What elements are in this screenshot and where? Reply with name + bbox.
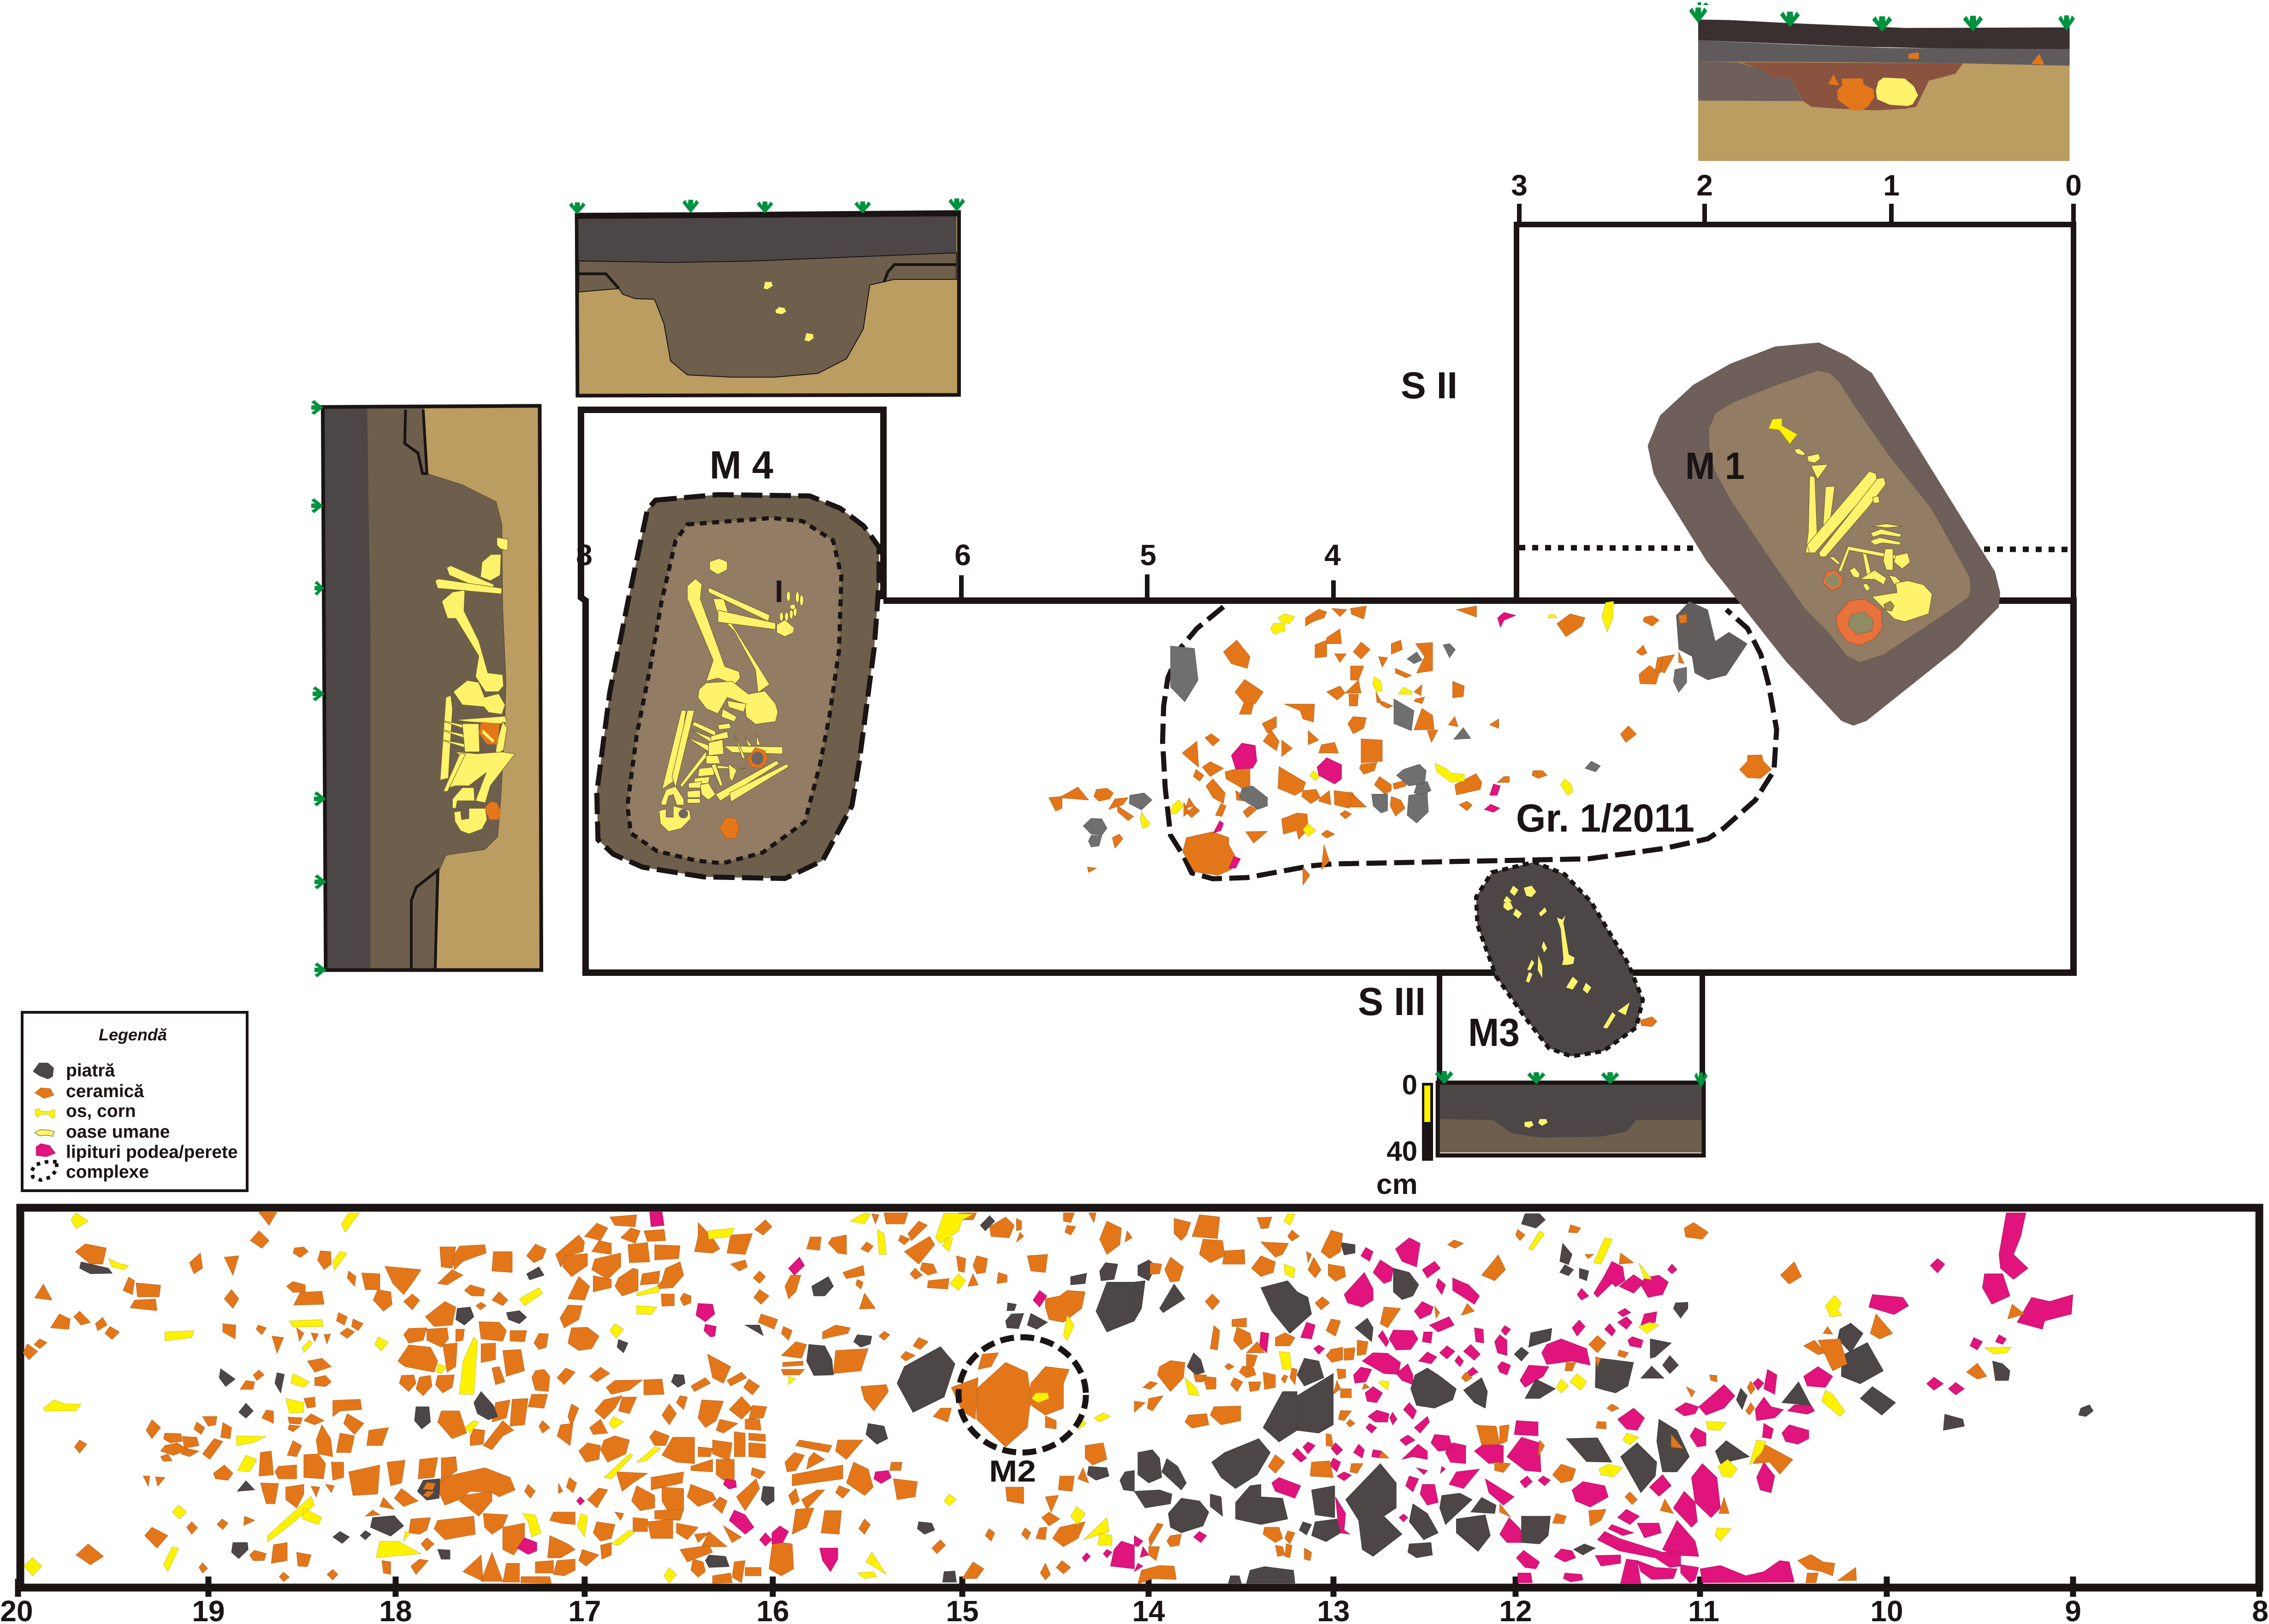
label: Gr. 1/2011: Gr. 1/2011 (1516, 797, 1694, 840)
axis numbers: upper trench: 4 (1324, 538, 1341, 572)
stones west (80, 1216, 1134, 1582)
axis numbers: upper trench: 6 (954, 538, 971, 572)
legend entries: oase umane (66, 1122, 170, 1142)
excavation trench outlines (581, 204, 2073, 1083)
vegetation markers: S III section (1435, 1071, 1707, 1088)
legend entries: lipituri podea/perete (66, 1142, 238, 1162)
legend (22, 1012, 247, 1191)
scale bar (1376, 1069, 1433, 1200)
label: M 1: M 1 (1685, 444, 1745, 487)
scale bar: 40 (1386, 1136, 1417, 1167)
scale bar: 0 (1402, 1069, 1417, 1100)
section profile: M4 top (575, 211, 959, 396)
axis numbers: upper trench: 8 (576, 538, 592, 572)
axis numbers: lower trench (0, 1594, 2269, 1624)
axis numbers: upper trench: 2 (1696, 169, 1713, 202)
axis numbers: upper trench (576, 169, 2082, 572)
legend symbols (31, 1063, 57, 1180)
legend title: Legendă (99, 1025, 167, 1044)
floor daub west (517, 1211, 1134, 1571)
label: S III: S III (1358, 980, 1426, 1024)
grave M1 plan (1647, 343, 2000, 726)
legend entries: ceramică (66, 1081, 144, 1101)
stones east (1134, 1214, 2093, 1583)
lower trench finds: section 20 to 14.5 (23, 1211, 1134, 1583)
legend entries: complexe (66, 1162, 149, 1182)
scale bar: cm (1376, 1169, 1418, 1200)
ceramics south row (76, 1213, 1132, 1583)
label: individual I: I (775, 574, 783, 609)
axis numbers: upper trench: 3 (1511, 169, 1528, 202)
label: M3: M3 (1468, 1011, 1520, 1055)
vegetation markers: S II section (1689, 7, 2075, 32)
label: M2: M2 (989, 1454, 1036, 1488)
label: M 4: M 4 (710, 443, 773, 487)
legend entries: os, corn (66, 1101, 136, 1121)
vegetation markers: M4 section (569, 198, 965, 214)
lower trench frame and scale (18, 1208, 2259, 1597)
legend entries: piatră (66, 1061, 115, 1081)
axis numbers: upper trench: 1 (1883, 169, 1900, 202)
ceramics west (23, 1211, 917, 1516)
axis numbers: upper trench: 0 (2065, 169, 2082, 202)
axis numbers: upper trench: 5 (1140, 538, 1156, 572)
orange inlay in stone (423, 1482, 436, 1497)
vegetation markers: left section (311, 400, 326, 977)
ceramics east (1134, 1215, 2024, 1584)
section profile: left vertical with skeleton (322, 406, 541, 970)
grave M4 plan (597, 495, 879, 879)
grave M3 plan with S III section (1438, 862, 1704, 1156)
complex M2 outline (959, 1337, 1086, 1453)
lower trench finds: section 14.5 to 8 (1134, 1213, 2093, 1584)
animal bone east (1185, 1214, 2011, 1541)
complex Gr. 1/2011 finds and outline (1049, 602, 1777, 885)
section profile: S II top right (1698, 2, 2070, 161)
label: S II: S II (1401, 365, 1457, 407)
floor daub east (1134, 1213, 2073, 1583)
legend entries (66, 1061, 238, 1182)
animal bone west (24, 1213, 1112, 1583)
